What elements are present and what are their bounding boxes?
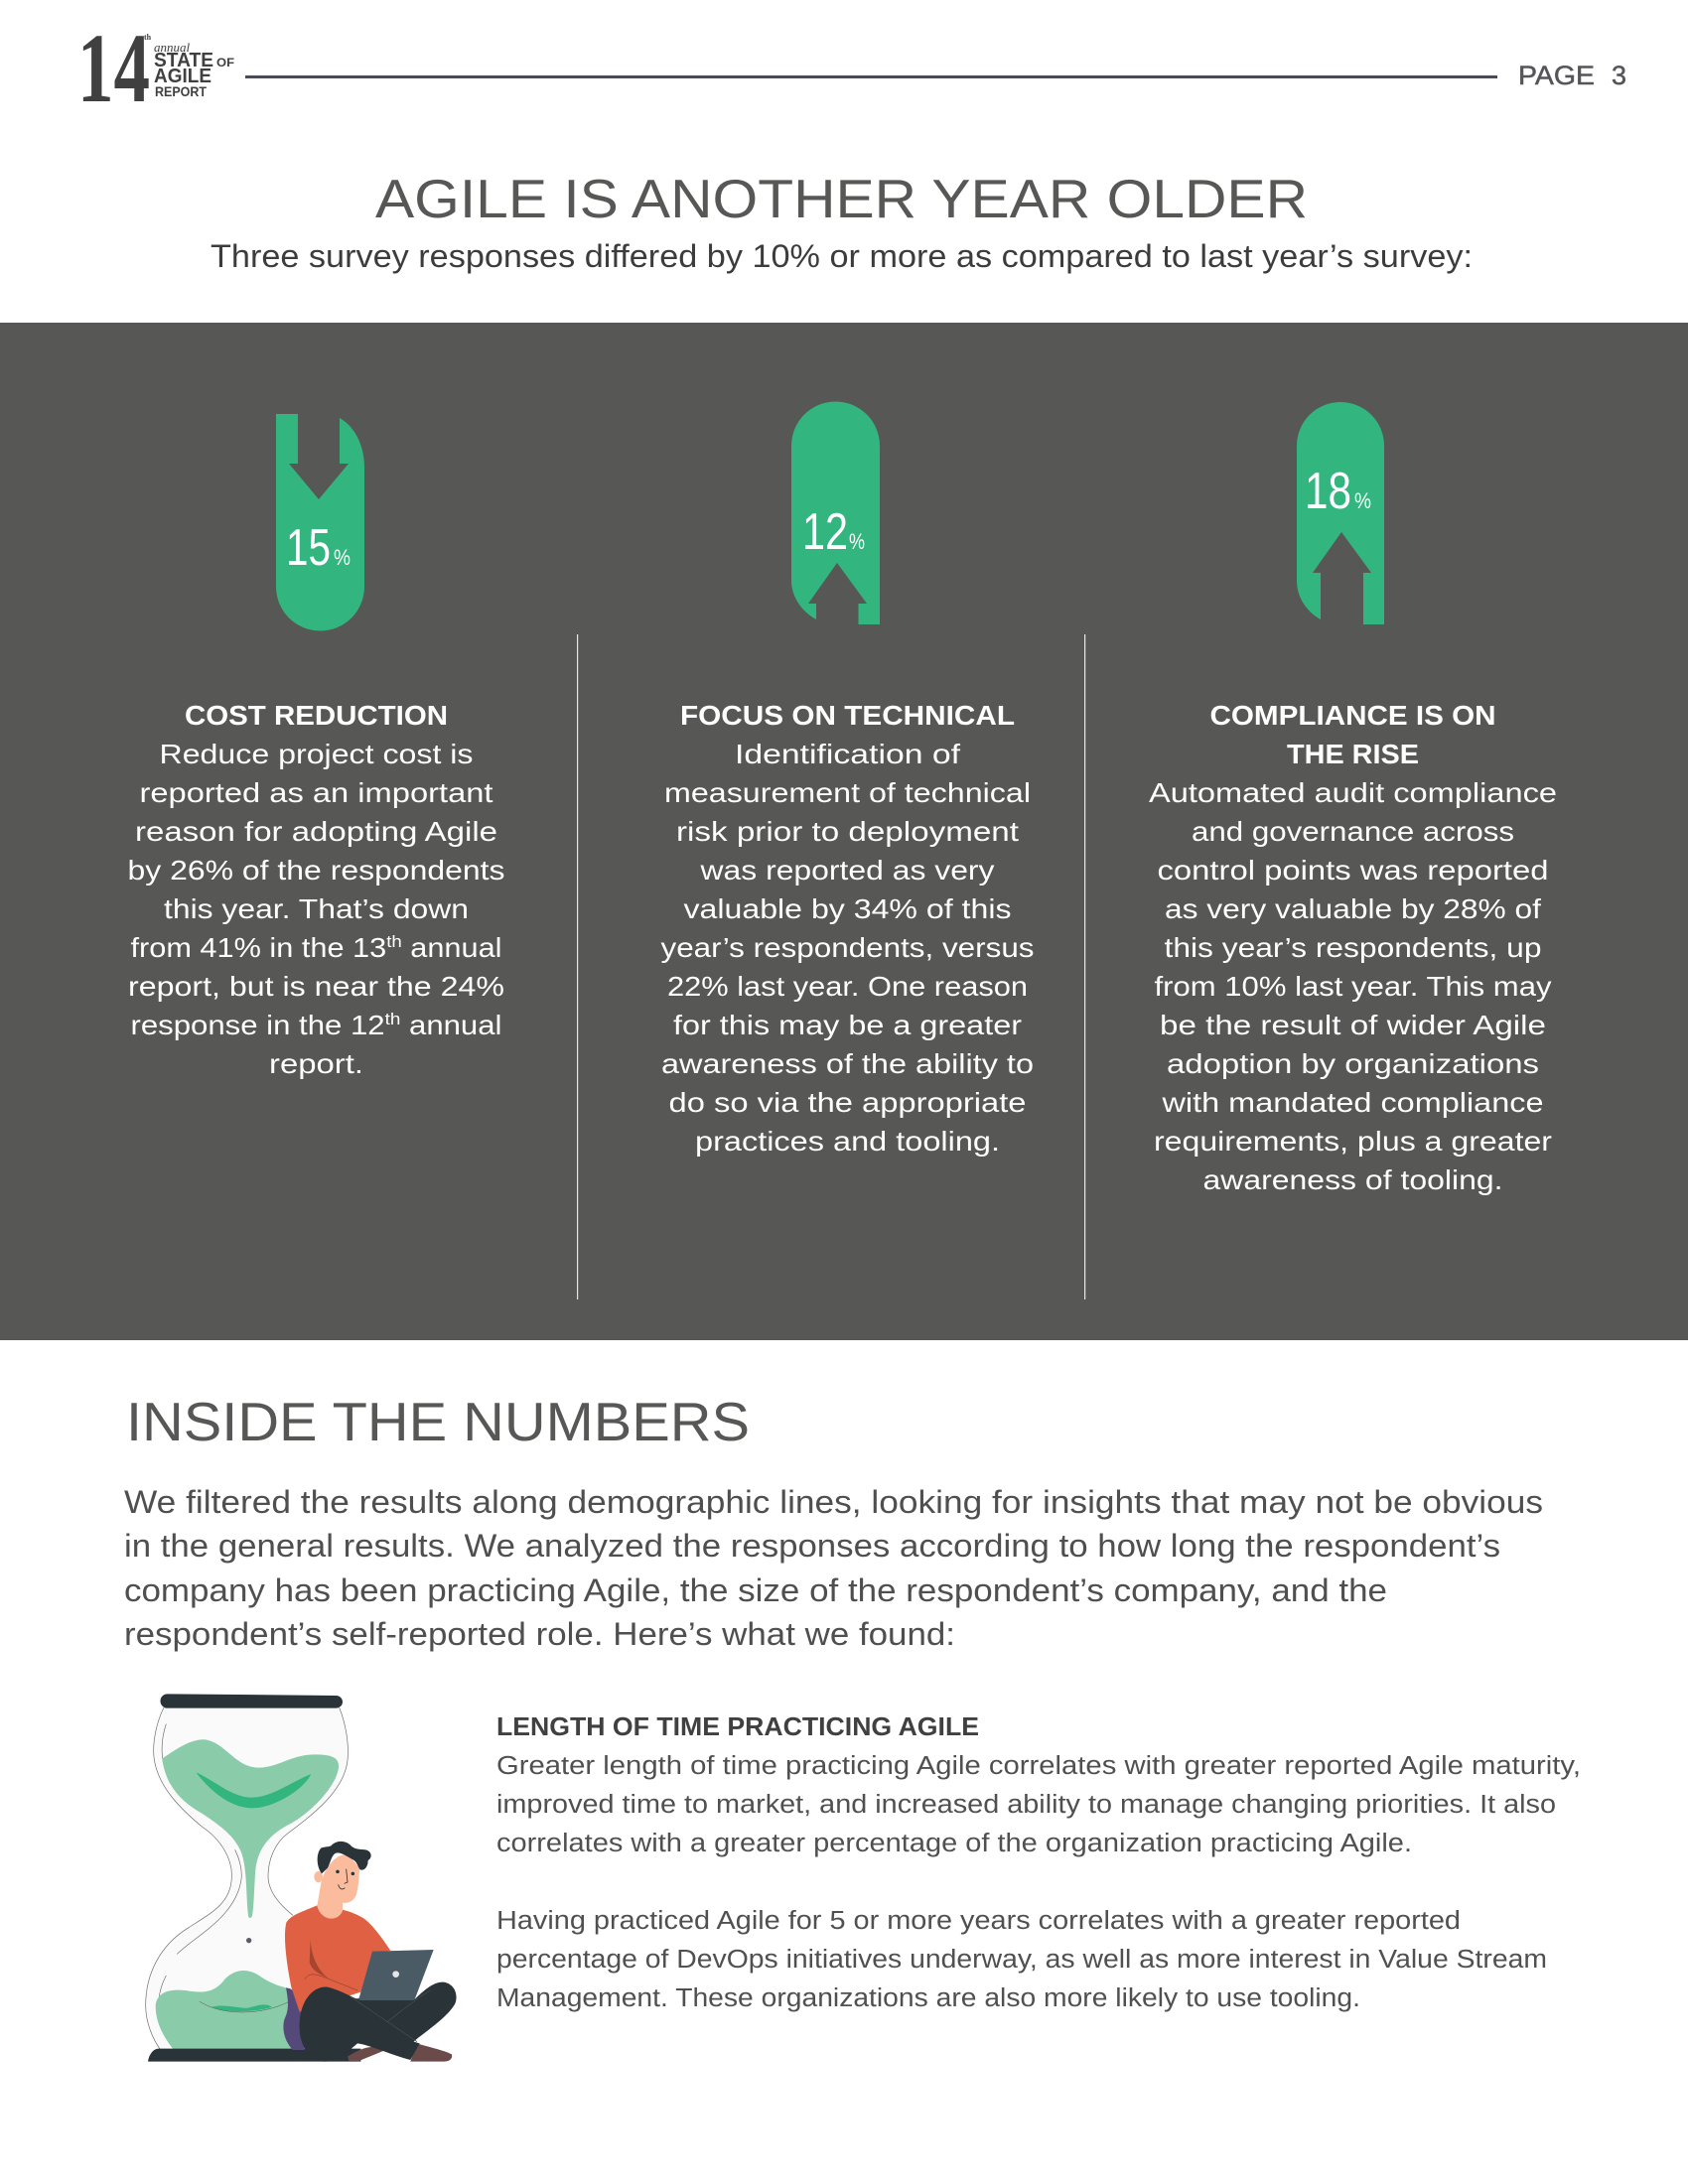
cushion bbox=[283, 1987, 305, 2050]
paragraph one: Greater length of time practicing Agile correlates with greater reported Agile maturity, bbox=[496, 1752, 1581, 1780]
text block: compliance is on the rise bbox=[1149, 700, 1557, 1195]
icon: 12% up arrow pill bbox=[791, 401, 880, 624]
paragraph one: correlates with a greater percentage of the organization practicing Agile. bbox=[496, 1830, 1412, 1857]
logo: 14th annual State of Agile Report: STATE bbox=[154, 50, 213, 71]
neck and face bbox=[317, 1854, 359, 1919]
subheading: LENGTH OF TIME PRACTICING AGILE bbox=[496, 1713, 979, 1741]
subtitle: Three survey responses differed by 10% or more as compared to last year’s survey: bbox=[211, 238, 1473, 274]
text block: intro paragraph: in the general results. We analyzed the responses according to how long the respondent’s bbox=[124, 1528, 1500, 1564]
paragraph one: improved time to market, and increased ability to manage changing priorities. It also bbox=[496, 1791, 1556, 1819]
paragraph one bbox=[496, 1752, 1581, 1857]
text block: focus on technical: year’s respondents, versus bbox=[661, 932, 1035, 963]
sweater fold bbox=[310, 1939, 329, 1979]
text block: cost reduction: from 41% in the 13 bbox=[131, 932, 364, 963]
text block: compliance is on the rise: be the result of wider Agile bbox=[1160, 1010, 1546, 1040]
text block: compliance is on the rise: requirements, plus a greater bbox=[1154, 1126, 1552, 1157]
heading: inside the numbers: INSIDE THE NUMBERS bbox=[126, 1391, 750, 1452]
text block: cost reduction: by 26% of the respondents bbox=[127, 855, 504, 886]
text block: cost reduction: reported as an important bbox=[139, 777, 493, 808]
panel: survey changes bbox=[0, 323, 1688, 1340]
paragraph two: percentage of DevOps initiatives underway, as well as more interest in Value Stream bbox=[496, 1946, 1547, 1974]
top sand bbox=[162, 1739, 339, 1918]
text block: cost reduction: report. bbox=[269, 1048, 363, 1079]
text block: length of time practicing agile bbox=[496, 1713, 1581, 2012]
bottom sand bbox=[156, 1971, 298, 2050]
icon: 15% down arrow pill: % bbox=[334, 545, 351, 570]
logo: 14th annual State of Agile Report bbox=[77, 13, 234, 123]
top cap bbox=[160, 1694, 343, 1708]
icon: 12% up arrow pill: 12 bbox=[802, 503, 848, 561]
text block: cost reduction: response in the 12 bbox=[131, 1010, 359, 1040]
text block: cost reduction: annual bbox=[400, 1010, 502, 1040]
eyes and mouth bbox=[337, 1869, 354, 1889]
icon: 15% down arrow pill: 15 bbox=[286, 519, 331, 577]
logo: 14th annual State of Agile Report: th bbox=[144, 33, 152, 42]
text block: focus on technical: was reported as very bbox=[699, 855, 995, 886]
text block: compliance is on the rise: Automated audit compliance bbox=[1149, 777, 1557, 808]
icon: 12% up arrow pill: % bbox=[849, 529, 865, 554]
sweater bbox=[285, 1905, 390, 2012]
text block: cost reduction: reason for adopting Agile bbox=[135, 816, 497, 847]
text block: intro paragraph: respondent’s self-reported role. Here’s what we found: bbox=[124, 1616, 955, 1652]
title: AGILE IS ANOTHER YEAR OLDER bbox=[375, 168, 1308, 229]
text block: focus on technical: risk prior to deployment bbox=[676, 816, 1019, 847]
logo: 14th annual State of Agile Report: REPORT bbox=[155, 83, 207, 99]
illustration: hourglass and person with laptop bbox=[146, 1694, 457, 2062]
text block: cost reduction: th bbox=[385, 1010, 400, 1028]
icon: 18% up arrow pill: % bbox=[1354, 488, 1371, 513]
logo: 14th annual State of Agile Report: OF bbox=[216, 56, 234, 69]
text block: focus on technical bbox=[661, 700, 1035, 1157]
ear bbox=[314, 1871, 323, 1882]
paragraph two bbox=[496, 1907, 1547, 2012]
text block: focus on technical: 22% last year. One reason bbox=[667, 971, 1028, 1002]
text block: focus on technical: practices and tooling. bbox=[695, 1126, 1000, 1157]
text block: compliance is on the rise: from 10% last year. This may bbox=[1154, 971, 1551, 1002]
base bbox=[148, 2049, 360, 2062]
text block: cost reduction: report, but is near the 24% bbox=[128, 971, 504, 1002]
page number: 3 bbox=[1612, 61, 1626, 90]
hair bbox=[318, 1842, 371, 1873]
top sand crescent bbox=[196, 1772, 311, 1808]
icon: 18% up arrow pill: 18 bbox=[1305, 463, 1351, 520]
page number bbox=[1518, 61, 1626, 90]
logo: 14th annual State of Agile Report: 14 bbox=[77, 13, 150, 123]
hourglass outline bbox=[146, 1707, 348, 2050]
text block: cost reduction: COST REDUCTION bbox=[185, 700, 448, 731]
text block: focus on technical: valuable by 34% of this bbox=[683, 893, 1011, 924]
text block: cost reduction: th bbox=[386, 932, 402, 951]
text block: compliance is on the rise: and governance across bbox=[1192, 816, 1514, 847]
column dividers bbox=[577, 634, 1085, 1299]
text block: cost reduction: Reduce project cost is bbox=[159, 739, 473, 769]
text block: focus on technical: Identification of bbox=[735, 739, 960, 769]
page number: PAGE bbox=[1518, 61, 1595, 90]
text block: focus on technical: awareness of the ability to bbox=[661, 1048, 1034, 1079]
shoes bbox=[348, 2047, 385, 2062]
icon: 18% up arrow pill bbox=[1297, 402, 1384, 624]
text block: cost reduction: annual bbox=[402, 932, 502, 963]
text block: intro paragraph bbox=[124, 1484, 1543, 1652]
falling grain bbox=[246, 1938, 251, 1943]
icon: 15% down arrow pill bbox=[276, 414, 364, 631]
text block: intro paragraph: company has been practicing Agile, the size of the respondent’s company, and the bbox=[124, 1572, 1387, 1608]
text block: compliance is on the rise: COMPLIANCE IS ON bbox=[1209, 700, 1495, 731]
text block: cost reduction: this year. That’s down bbox=[164, 893, 469, 924]
text block: compliance is on the rise: adoption by organizations bbox=[1167, 1048, 1539, 1079]
text block: cost reduction bbox=[127, 700, 504, 1079]
text block: compliance is on the rise: as very valuable by 28% of bbox=[1165, 893, 1541, 924]
bottom sand crescent bbox=[211, 2004, 272, 2011]
paragraph two: Having practiced Agile for 5 or more years correlates with a greater reported bbox=[496, 1907, 1461, 1935]
text block: compliance is on the rise: this year’s respondents, up bbox=[1164, 932, 1541, 963]
text block: compliance is on the rise: with mandated compliance bbox=[1161, 1087, 1543, 1118]
logo: 14th annual State of Agile Report: AGILE bbox=[154, 66, 211, 87]
hourglass glass bbox=[146, 1707, 348, 2050]
text block: compliance is on the rise: THE RISE bbox=[1287, 739, 1419, 769]
laptop bbox=[350, 1950, 434, 2000]
text block: focus on technical: do so via the appropriate bbox=[669, 1087, 1027, 1118]
text block: focus on technical: measurement of technical bbox=[664, 777, 1031, 808]
legs bbox=[299, 1982, 457, 2062]
header rule bbox=[245, 75, 1497, 78]
text block: focus on technical: FOCUS ON TECHNICAL bbox=[680, 700, 1015, 731]
logo: 14th annual State of Agile Report: annual bbox=[154, 40, 191, 55]
paragraph two: Management. These organizations are also more likely to use tooling. bbox=[496, 1984, 1360, 2012]
text block: compliance is on the rise: control points was reported bbox=[1158, 855, 1549, 886]
text block: focus on technical: for this may be a greater bbox=[673, 1010, 1022, 1040]
text block: intro paragraph: We filtered the results along demographic lines, looking for insights that may not be obvious bbox=[124, 1484, 1543, 1520]
text block: compliance is on the rise: awareness of tooling. bbox=[1203, 1164, 1503, 1195]
